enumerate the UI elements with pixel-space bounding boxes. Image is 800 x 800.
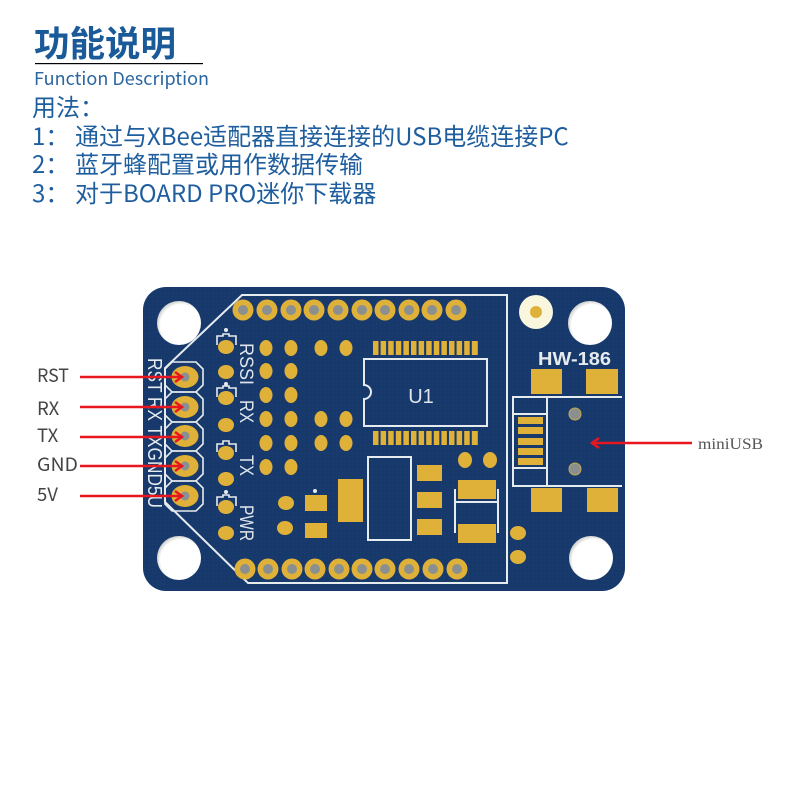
tall gold pad	[338, 479, 363, 522]
arrow: miniUSB	[592, 438, 692, 448]
usage text block: 1：	[32, 117, 69, 152]
USB contacts	[518, 417, 543, 465]
title: 功能说明	[34, 16, 176, 67]
fiducial	[519, 295, 553, 329]
arrow: RST	[80, 372, 182, 382]
pair of oval pads	[458, 452, 497, 468]
arrow: TX	[80, 432, 182, 442]
LED silkscreen labels: RX	[235, 400, 256, 423]
usage text block: 对于BOARD PRO迷你下载器	[75, 174, 376, 209]
pin labels	[37, 362, 78, 507]
pin labels: RX	[37, 395, 60, 421]
silkscreen outline	[165, 295, 507, 583]
LED silkscreen labels	[235, 343, 256, 541]
pin labels: TX	[37, 422, 59, 448]
bottom through-hole pad row	[234, 558, 468, 580]
usage text block	[32, 88, 569, 209]
USB connector outline	[513, 397, 622, 486]
LED silkscreen brackets	[217, 334, 236, 506]
board body	[143, 287, 625, 591]
capacitor	[455, 480, 498, 543]
chip U1 pins	[373, 341, 478, 445]
three gold pads	[417, 465, 442, 535]
large component outline	[368, 457, 411, 540]
usage text block: 通过与XBee适配器直接连接的USB电缆连接PC	[75, 117, 569, 152]
chip U1 outline	[364, 359, 487, 426]
LED silkscreen labels: PWR	[235, 505, 256, 541]
header pin outlines	[165, 362, 203, 511]
USB holes	[569, 408, 581, 475]
top through-hole pad row	[232, 300, 466, 320]
pin labels: 5V	[37, 481, 58, 507]
USB mounting pads	[531, 369, 618, 512]
LED silkscreen labels: RSSI	[235, 343, 256, 385]
chip U1 label: U1	[408, 386, 434, 408]
usage text block: 用法：	[32, 88, 104, 123]
pin labels: RST	[37, 362, 69, 388]
component pad columns	[260, 340, 352, 475]
board name: HW-186	[538, 349, 611, 369]
mounting holes	[157, 301, 613, 580]
LED silkscreen labels: TX	[235, 455, 256, 476]
arrow: GND	[80, 461, 182, 471]
LED pads	[218, 340, 234, 540]
header pin silkscreen labels: RST RX TXGND5U	[143, 358, 165, 508]
usage text block: 3：	[32, 174, 69, 209]
usage text block: 蓝牙蜂配置或用作数据传输	[75, 145, 363, 180]
small component pads	[277, 489, 327, 538]
pin labels: GND	[37, 451, 78, 477]
miniUSB label: miniUSB	[698, 436, 763, 453]
header pins	[172, 366, 198, 507]
LED polarity dots	[224, 328, 228, 494]
arrow: 5V	[80, 491, 182, 501]
arrow: RX	[80, 402, 182, 412]
panel: circuit board	[143, 287, 625, 591]
usage text block: 2：	[32, 145, 69, 180]
right oval pads	[510, 526, 526, 564]
subtitle: Function Description	[34, 65, 209, 91]
